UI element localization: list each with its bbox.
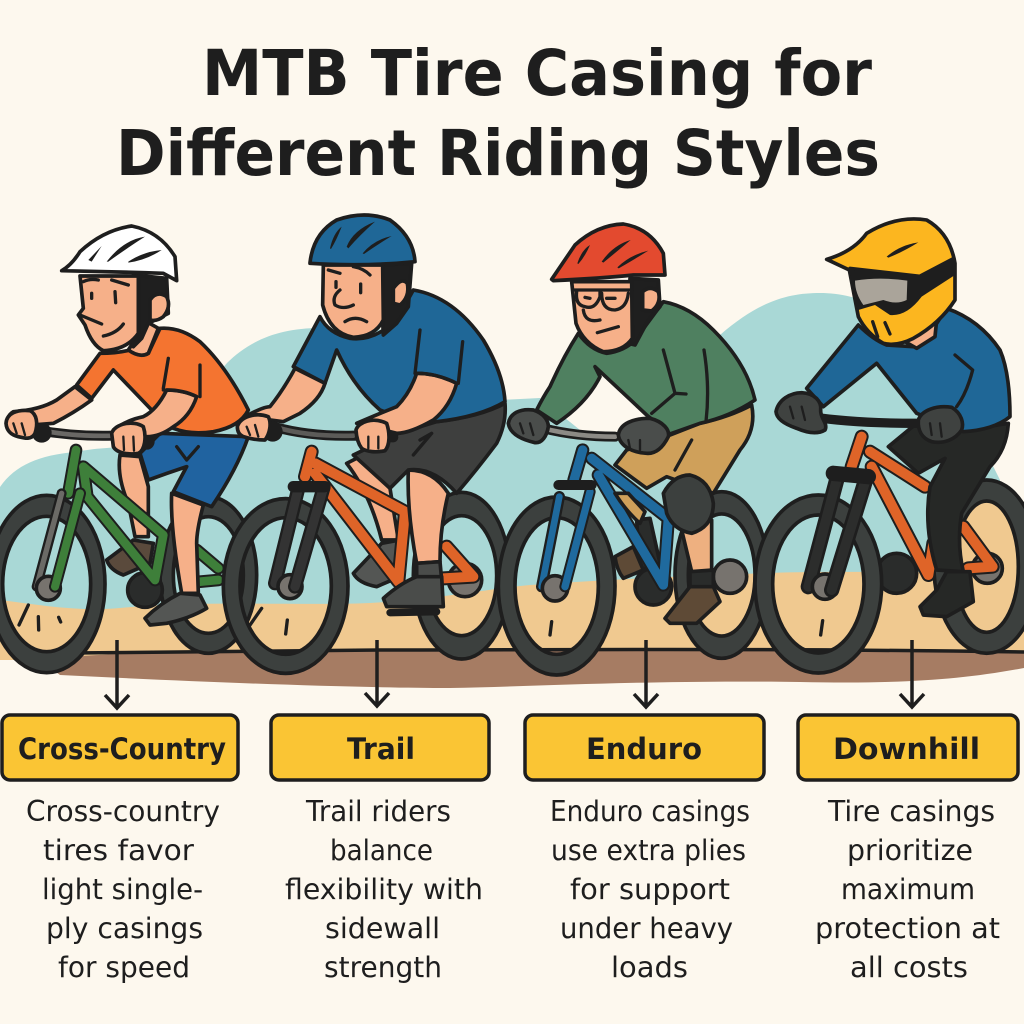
text: trail description: Trail riders (305, 795, 451, 828)
text: cross-country description: ply casings (46, 912, 203, 945)
text: trail description: flexibility with (285, 873, 483, 906)
near leg (408, 470, 448, 563)
front fork and hub (19, 493, 80, 630)
sandy ground (0, 568, 1024, 660)
ear and hair (380, 263, 412, 335)
helmet details (850, 268, 918, 337)
black shoe (920, 572, 973, 617)
text: downhill description: Tire casings (827, 795, 995, 828)
text: downhill description: protection at (815, 912, 1000, 945)
text: trail description: strength (324, 951, 442, 984)
label: trail: Trail (347, 732, 415, 766)
front fork and hub (250, 487, 325, 634)
near leg (171, 493, 203, 593)
sleeve lines (163, 358, 200, 460)
title (116, 37, 880, 190)
handlebar (810, 417, 917, 423)
blue helmet (310, 215, 415, 265)
face features (328, 267, 370, 322)
rider: trail (223, 215, 510, 673)
glasses and features (573, 290, 632, 333)
ear and hair (133, 275, 169, 347)
green bike frame (68, 450, 218, 582)
face (323, 265, 383, 337)
red helmet (552, 224, 665, 281)
arrow: enduro (634, 640, 658, 707)
text: enduro description: Enduro casings (550, 795, 750, 828)
tan shorts (615, 405, 753, 493)
text: enduro description: use extra plies (551, 834, 746, 867)
knee pad (663, 475, 713, 533)
label: trail (271, 715, 489, 780)
thigh behind frame (615, 493, 645, 523)
near arm (113, 390, 197, 437)
orange bike frame (852, 437, 1002, 593)
text: trail description (285, 795, 483, 984)
hands (6, 410, 145, 454)
yellow full-face helmet (827, 219, 955, 344)
rear wheel (675, 492, 768, 658)
text: trail description: sidewall (325, 912, 440, 945)
riders three and four (498, 219, 1024, 675)
front wheel (755, 495, 882, 673)
far arm (8, 387, 92, 427)
gloves (776, 393, 962, 442)
shoe (145, 593, 207, 625)
goggle lens (855, 279, 907, 305)
text: downhill description: prioritize (847, 834, 973, 867)
neck (905, 320, 937, 348)
handlebar (32, 423, 155, 450)
orange shirt (77, 328, 248, 433)
label: cross-country (2, 715, 238, 780)
text: cross-country description: tires favor (43, 834, 194, 867)
rear wheel inner sand (955, 501, 1018, 632)
background hills (0, 293, 1000, 640)
text: cross-country description: light single- (42, 873, 203, 906)
arrow: trail (365, 640, 389, 706)
arrow: cross-country (105, 640, 129, 708)
text: cross-country description (26, 795, 220, 984)
front fork and hub (542, 485, 592, 635)
blue bike frame (574, 450, 668, 585)
front wheel (0, 495, 105, 673)
back leg and shoe (347, 457, 400, 587)
blue shirt (293, 290, 505, 422)
handlebar (543, 428, 615, 437)
shirt folds (652, 350, 708, 470)
neck (128, 322, 158, 355)
trail edge line (70, 650, 1024, 653)
text: enduro description (550, 795, 750, 984)
riders one and two (0, 215, 510, 673)
rider: cross-country (0, 226, 257, 673)
text: cross-country description: for speed (58, 951, 190, 984)
text: enduro description: under heavy (560, 912, 733, 945)
far arm (245, 368, 325, 422)
rear wheel (413, 492, 510, 659)
arrow: downhill (900, 640, 924, 707)
text: cross-country description: Cross-country (26, 795, 220, 828)
back leg and shoe (107, 455, 162, 607)
rider: downhill (755, 219, 1024, 673)
rear wheel (160, 497, 257, 653)
goggle strap (850, 257, 955, 315)
white helmet (62, 226, 177, 281)
shirt folds (413, 330, 463, 455)
lower leg (682, 520, 712, 572)
black trousers (888, 423, 1008, 572)
rear tire (934, 480, 1024, 653)
front wheel (498, 497, 615, 675)
grey shorts (353, 403, 505, 493)
face features (80, 279, 128, 336)
title: MTB Tire Casing for (202, 37, 872, 110)
face (572, 282, 632, 352)
rider: enduro (498, 224, 768, 675)
text: downhill description: all costs (850, 951, 968, 984)
text: downhill description (815, 795, 1000, 984)
gloves (508, 410, 669, 453)
dark trail strip (40, 650, 1024, 688)
sock and shoe (383, 562, 443, 613)
hands (237, 415, 389, 452)
text: trail description: balance (330, 834, 433, 867)
blue shorts (140, 433, 248, 507)
handlebar (263, 422, 393, 442)
back lower leg and shoe (615, 518, 747, 605)
text: enduro description: for support (570, 873, 730, 906)
text: downhill description: maximum (841, 873, 975, 906)
front fork and hub (808, 473, 868, 635)
near arm (357, 373, 457, 433)
blue jersey (807, 308, 1010, 432)
front wheel (223, 499, 348, 673)
green shirt (537, 302, 755, 434)
jersey folds (955, 355, 973, 407)
label: enduro: Enduro (586, 732, 702, 766)
label: enduro (525, 715, 764, 780)
label: downhill: Downhill (833, 732, 980, 766)
title: Different Riding Styles (116, 117, 880, 190)
text: enduro description: loads (611, 951, 688, 984)
ear and hair (628, 278, 660, 345)
orange bike frame (305, 452, 482, 597)
label: cross-country: Cross-Country (18, 732, 226, 766)
label: downhill (798, 715, 1018, 780)
face (78, 276, 138, 351)
sock and shoe (665, 570, 720, 623)
